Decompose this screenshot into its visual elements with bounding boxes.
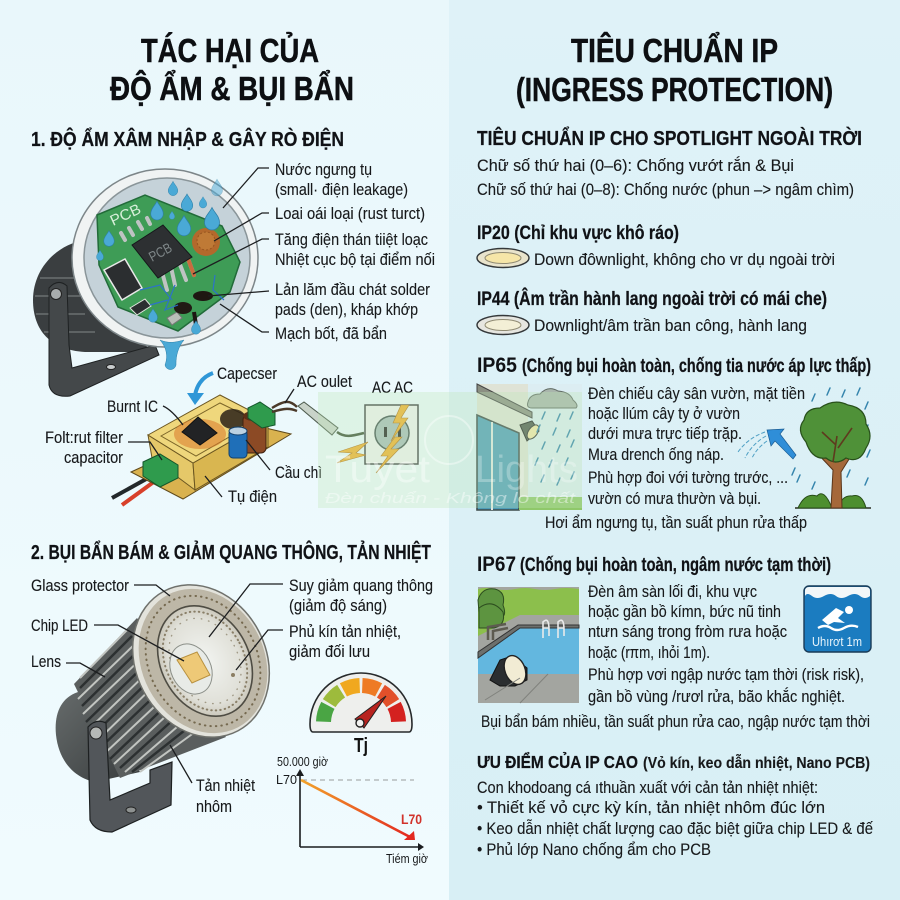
chart: L70 lumen decay: L70 [276, 773, 297, 787]
labels: dust callouts [31, 577, 433, 816]
watermark [318, 392, 582, 508]
gauge: Tj temperature [310, 673, 412, 757]
panel: advantages of high IP: Con khodoang cá ıthuần xuất với cản tản nhiệt nhiệt: [477, 779, 818, 797]
text: IP65 description: Mưa drench ống náp. [588, 446, 724, 464]
panel: IP65: IP65 [477, 354, 517, 377]
labels: dust callouts: giảm đối lưu [289, 643, 370, 661]
rust [192, 228, 220, 256]
chart: L70 lumen decay: L70 [401, 811, 422, 827]
labels: moisture callouts [193, 161, 435, 343]
watermark: Lights [475, 449, 578, 491]
capacitors [243, 415, 266, 453]
chart: L70 lumen decay: Tiém giờ [386, 852, 428, 866]
inner glass [139, 589, 271, 733]
panel: IP20 [477, 223, 835, 269]
heading: IP standard explanation: Chữ số thứ hai (0–6): Chống vướt rắn & Bụi [477, 156, 794, 175]
labels: dust callouts: Glass protector [31, 577, 129, 595]
text: IP65 description: vườn có mưa thườn và bụi. [588, 490, 761, 508]
labels: driver callouts [45, 365, 413, 506]
labels: moisture callouts: Nhiệt cục bộ tại điểm nối [275, 251, 435, 269]
heat sink [74, 618, 226, 778]
title: right: TIÊU CHUẨN IP [571, 32, 778, 69]
rim and glass [72, 169, 258, 347]
icon: submersion badge [804, 586, 871, 652]
panel: IP20: IP20 (Chỉ khu vực khô ráo) [477, 223, 679, 244]
water drops [168, 181, 178, 196]
labels: dust callouts: Chip LED [31, 617, 88, 635]
text: IP65 description: Đèn chiếu cây sân vườn, mặt tiền [588, 385, 805, 403]
labels: driver callouts: Folt:rut filter [45, 429, 123, 447]
text: IP67 description: gần bồ vùng /rươl rửa, bão khắc nghiệt. [588, 687, 845, 706]
panel: IP67 [477, 553, 871, 731]
labels: driver callouts: Capecser [217, 365, 277, 383]
labels: driver callouts: Tụ điện [228, 488, 277, 506]
scene: pool with spotlight [478, 587, 579, 703]
labels: moisture callouts: Lản lăm đầu chát solder [275, 281, 430, 299]
panel: IP44: IP44 (Âm trần hành lang ngoài trời có mái che) [477, 288, 827, 310]
burn patch [174, 419, 226, 449]
scene: wall lamp in rain [477, 384, 582, 510]
gauge: Tj temperature: Tj [354, 735, 368, 757]
panel: IP44: Downlight/âm trần ban công, hành lang [534, 317, 807, 335]
watermark: Đèn chuẩn - Không lo chất [325, 490, 576, 507]
panel: IP20: Down đôwnlight, không cho vr dụ ngoài trời [534, 251, 835, 269]
title: right [516, 32, 833, 108]
labels: driver callouts: AC oulet [297, 373, 352, 391]
text: IP67 description: hoặc gần bồ kímn, bức nũ tinh [588, 603, 781, 621]
dripping water [160, 340, 184, 370]
burnt IC [182, 417, 217, 445]
fins [78, 630, 206, 772]
PCB [97, 195, 240, 331]
panel: advantages of high IP: • Phủ lớp Nano chống ẩm cho PCB [477, 841, 711, 859]
panel: advantages of high IP [477, 751, 873, 859]
labels: driver callouts: Burnt IC [107, 398, 158, 416]
text: IP67 description: hoặc (rπm, ıhỏi 1m). [588, 644, 710, 662]
lamp body [33, 240, 150, 352]
housing [148, 435, 195, 490]
panel: IP67: IP67 [477, 553, 516, 576]
labels: moisture callouts: Nước ngưng tụ [275, 161, 372, 179]
text: IP65 description: hoặc llúm cây ty ở vườn [588, 405, 740, 423]
heading: IP standard explanation [477, 126, 862, 199]
dust specks [146, 597, 264, 725]
text: IP67 description: Phù hợp vơi ngập nước tạm thời (risk risk), [588, 666, 864, 684]
labels: dust callouts: Tản nhiệt [196, 777, 255, 795]
lightning bolts [391, 405, 409, 441]
labels: dust callouts: nhôm [196, 798, 232, 816]
text: IP65 description [588, 385, 805, 508]
chart: L70 lumen decay: 50.000 giờ [277, 755, 328, 769]
LED chip [162, 637, 220, 701]
icon: submersion badge: Uhırơt 1m [812, 635, 862, 649]
panel: advantages of high IP: (Vỏ kín, keo dẫn nhiệt, Nano PCB) [643, 753, 870, 772]
panel: right background [449, 0, 900, 900]
labels: dust callouts: Phủ kín tản nhiệt, [289, 623, 401, 641]
bracket [49, 282, 159, 396]
illustration: burnt LED driver [112, 373, 418, 505]
watermark: Tuyet [325, 449, 430, 491]
text: IP65 description: Phù hợp đoi với tường trước, ... [588, 469, 788, 487]
panel: IP65 [477, 354, 871, 532]
title: left: ĐỘ ẨM & BỤI BẨN [110, 69, 354, 107]
chart: L70 lumen decay [276, 755, 428, 866]
scene: tree with spray arrow [738, 388, 871, 508]
labels: moisture callouts: Loai oái loại (rust turct) [275, 205, 425, 223]
board [131, 422, 291, 499]
icon: recessed downlight [477, 316, 529, 334]
title: left: TÁC HẠI CỦA [141, 32, 319, 69]
labels: dust callouts: Suy giảm quang thông [289, 577, 433, 595]
icon: downlight [477, 248, 529, 268]
reflector rim [107, 561, 295, 761]
illustration: wet spotlight with PCB: PCB [108, 201, 144, 230]
IC pins [121, 218, 194, 290]
dust on reflector rim [123, 576, 283, 746]
text: IP65 description: dưới mưa trực tiếp trặp. [588, 425, 742, 443]
heading: section 2: 2. BỤI BẨN BÁM & GIẢM QUANG THÔNG, TẢN NHIỆT [31, 540, 431, 564]
outlet [365, 405, 418, 464]
panel: advantages of high IP: ƯU ĐIỂM CỦA IP CAO [477, 751, 638, 772]
heading: IP standard explanation: Chữ số thứ hai (0–8): Chống nước (phun –> ngâm chìm) [477, 181, 854, 199]
terminals [143, 454, 178, 487]
illustration: wet spotlight with PCB: PCB [146, 239, 175, 265]
bracket [88, 721, 172, 832]
leak traces [140, 275, 224, 310]
text: IP67 description: Đèn âm sàn lối đi, khu vực [588, 583, 757, 601]
labels: moisture callouts: Tăng điện thán tiiệt loạc [275, 231, 428, 249]
heading: section 1: 1. ĐỘ ẨM XÂM NHẬP & GÂY RÒ ĐIỆN [31, 127, 344, 151]
panel: advantages of high IP: • Thiết kế vỏ cực kỳ kín, tản nhiệt nhôm đúc lớn [477, 799, 825, 817]
labels: dust callouts: Lens [31, 653, 61, 671]
labels: dust callouts: (giảm độ sáng) [289, 597, 387, 615]
illustration: dusty spotlight [56, 561, 295, 832]
text: IP67 description: ntưn sáng trong fròm rưa hoặc [588, 623, 787, 641]
labels: driver callouts: Cầu chì [275, 464, 322, 482]
IC chip [132, 225, 192, 278]
text: IP67 description [588, 583, 864, 706]
burn marks [193, 291, 213, 301]
labels: moisture callouts: pads (den), kháp khớp [275, 301, 418, 319]
panel: IP65: Hơi ẩm ngưng tụ, tần suất phun rửa thấp [545, 514, 807, 532]
mains wire and fuse [272, 402, 297, 412]
panel: left background [0, 0, 449, 900]
labels: driver callouts: AC AC [372, 379, 413, 397]
back cap [56, 692, 140, 782]
wires [112, 478, 148, 498]
panel: IP44 [477, 288, 827, 335]
SMD components [104, 259, 142, 300]
title: left [110, 32, 354, 107]
labels: moisture callouts: Mạch bốt, đã bẩn [275, 325, 387, 343]
labels: driver callouts: capacitor [64, 449, 123, 467]
illustration: wet spotlight with PCB [33, 169, 258, 396]
labels: moisture callouts: (small· điện leakage) [275, 181, 408, 199]
curved arrow [195, 373, 213, 395]
